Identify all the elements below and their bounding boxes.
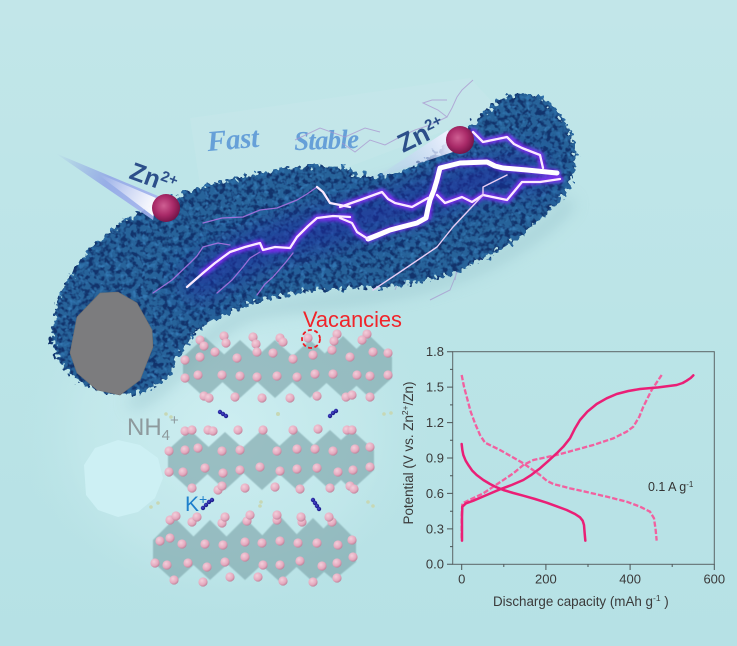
label: K+: K xyxy=(185,493,199,516)
vacancy marker xyxy=(302,330,320,348)
x axis title: -1 xyxy=(653,593,661,603)
y axis title: Potential (V vs. Zn xyxy=(401,415,416,524)
interlayer K+ ions upper xyxy=(218,409,338,418)
pale panel behind slogans xyxy=(190,78,500,185)
Zn2+ ion trail right xyxy=(375,130,453,178)
y axis tick labels xyxy=(426,344,444,572)
fiber shadow xyxy=(130,200,570,405)
label: Vacancies: Vacancies xyxy=(303,307,402,332)
label: Zn2+ left: Zn xyxy=(126,157,164,194)
interlayer K+ ions lower xyxy=(201,498,321,511)
rate label: 0.1 A g xyxy=(648,480,686,494)
interlayer NH4+ dots upper xyxy=(164,411,393,419)
y axis tick labels: 0.6 xyxy=(426,486,444,501)
lightning: secondary bolts xyxy=(187,132,560,287)
solid curves xyxy=(462,375,693,541)
faint lightning above fiber xyxy=(295,80,473,300)
heading: Fast: Fast xyxy=(205,122,261,158)
x axis tick labels xyxy=(458,572,725,586)
lightning: thick main bolt xyxy=(368,162,557,239)
chart: discharge capacity versus potential xyxy=(400,344,725,609)
label: NH4+: + xyxy=(170,412,179,429)
glow of main lightning xyxy=(203,132,560,273)
label: Zn2+ right: Zn xyxy=(392,118,434,158)
heading: Stable: Stable xyxy=(293,124,360,156)
x axis title: ) xyxy=(661,594,669,609)
nanoflake fiber body xyxy=(55,96,573,391)
lightning network xyxy=(153,132,560,295)
interlayer NH4+ dots lower xyxy=(149,500,375,509)
dashed curves xyxy=(462,375,662,541)
y axis tick labels: 0.0 xyxy=(426,557,444,572)
plot frame xyxy=(453,352,714,564)
y axis tick labels: 0.9 xyxy=(426,450,444,465)
rate label: -1 xyxy=(686,480,694,489)
x axis tick labels: 600 xyxy=(703,572,725,586)
electric blue core tint xyxy=(200,172,530,280)
thin left branches xyxy=(153,187,317,295)
y axis tick labels: 0.3 xyxy=(426,521,444,536)
y axis tick labels: 1.2 xyxy=(426,415,444,430)
grey core cross-section xyxy=(70,292,153,395)
x axis tick labels: 200 xyxy=(535,572,557,586)
label: K+: + xyxy=(199,491,207,507)
Zn2+ ion left xyxy=(152,194,180,222)
label: Zn2+ left: 2+ xyxy=(158,168,181,190)
Zn2+ ion trail left xyxy=(55,153,158,220)
crystal layer 2 xyxy=(164,424,375,495)
y axis title: 2+ xyxy=(400,405,410,415)
y axis tick labels: 1.8 xyxy=(426,344,444,359)
pale glow behind crystal xyxy=(20,250,430,610)
x axis tick labels: 0 xyxy=(458,572,465,586)
Zn2+ ion right xyxy=(446,126,474,154)
lightning: long thin bolt xyxy=(373,175,507,290)
pale sphere xyxy=(84,440,163,517)
crystal layer 1 xyxy=(180,329,393,403)
label: NH4+: 4 xyxy=(162,427,170,444)
x axis title: Discharge capacity (mAh g xyxy=(493,594,653,609)
label: NH4+: NH xyxy=(127,414,162,441)
crystal layer 3 xyxy=(150,510,358,587)
y axis title: /Zn) xyxy=(401,382,416,405)
x axis tick labels: 400 xyxy=(619,572,641,586)
y axis tick labels: 1.5 xyxy=(426,380,444,394)
label: Zn2+ right: 2+ xyxy=(422,112,445,135)
